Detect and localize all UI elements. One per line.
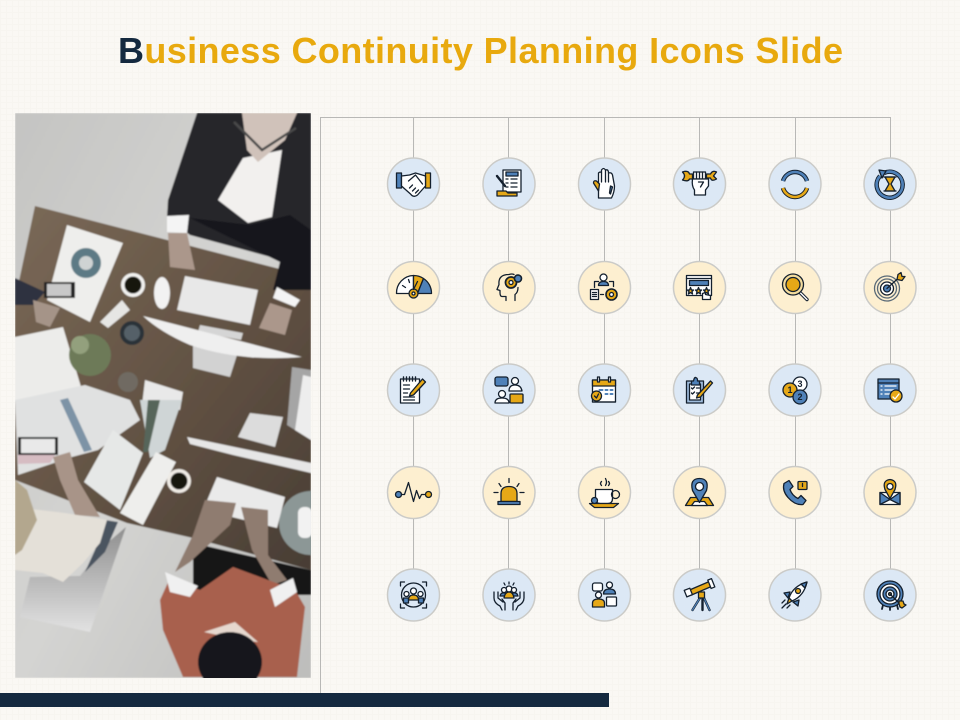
icon: calendar with check <box>578 364 630 416</box>
icon: raised glove hand <box>578 158 630 210</box>
icon: numbered speech bubbles: 1 <box>787 385 793 395</box>
icon: two people with chat and laptop <box>483 364 535 416</box>
icon: hands holding people <box>483 569 535 621</box>
connector lines <box>320 117 890 693</box>
icon: telescope on tripod <box>674 569 726 621</box>
icon: clipboard with pencil <box>674 364 726 416</box>
icon: head with gears <box>483 262 535 314</box>
icon: fist with wrench <box>674 158 726 210</box>
icon: notepad with pencil <box>388 364 440 416</box>
icon: checklist with pencil <box>483 158 535 210</box>
icon: person, document and gear flow <box>578 262 630 314</box>
icon: rocket <box>769 569 821 621</box>
icon: target on stand with arrow <box>864 569 916 621</box>
icon: team in focus target <box>388 569 440 621</box>
icon: phone with alert <box>769 466 821 518</box>
icon grid <box>388 158 916 621</box>
title: Business Continuity Planning Icons Slide <box>118 30 843 71</box>
icon: magnifying glass <box>769 262 821 314</box>
icon: numbered speech bubbles: 2 <box>797 392 803 402</box>
icon: pulse line <box>388 466 440 518</box>
icon: browser window with star rating <box>674 262 726 314</box>
icon: alarm siren <box>483 466 535 518</box>
icon: target with arrow <box>864 262 916 314</box>
icon: numbered speech bubbles <box>769 364 821 416</box>
icon: checklist window with check badge <box>864 364 916 416</box>
icon: handshake <box>388 158 440 210</box>
icon: hourglass in circular arrow <box>864 158 916 210</box>
icon: coffee cup <box>578 466 630 518</box>
icon: cycle arrows <box>769 158 821 210</box>
photo: team working at desk, top view <box>15 113 311 678</box>
icon: two people asking and answering <box>578 569 630 621</box>
icon: pin over envelope <box>864 466 916 518</box>
icon: numbered speech bubbles: 3 <box>797 379 803 389</box>
icon: speed gauge <box>388 262 440 314</box>
bottom bar <box>0 693 609 707</box>
icon: map location pin <box>674 466 726 518</box>
